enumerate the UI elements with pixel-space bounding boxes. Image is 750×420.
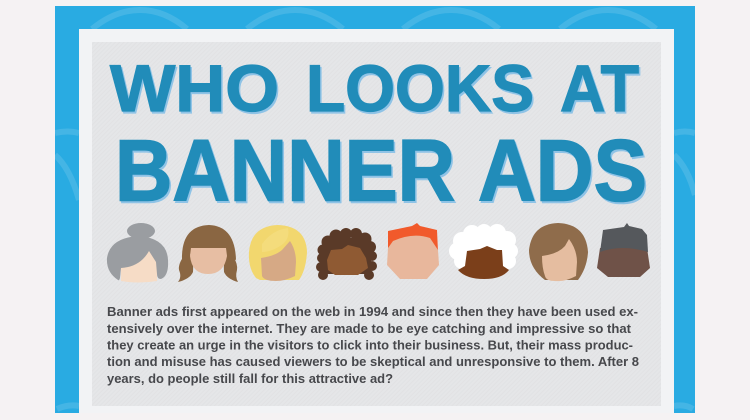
icon: red hair man <box>387 223 439 279</box>
panel: white inner card <box>79 29 674 413</box>
icon: dark curly hair woman <box>316 228 377 280</box>
intro paragraph: tensively over the internet. They are made to be eye catching and impressive so that <box>107 321 632 336</box>
icon: short brown hair woman <box>529 223 588 281</box>
title line: who looks at: WHO <box>112 53 280 127</box>
icon: white afro dark skin woman <box>449 224 518 279</box>
title line: banner ads: ADS <box>480 124 648 222</box>
title <box>110 51 648 222</box>
row of faces <box>107 223 650 282</box>
icon: brown hair pigtails woman <box>178 225 238 282</box>
title line: who looks at: LOOKS <box>308 53 536 127</box>
title line: who looks at <box>110 51 640 127</box>
title line: who looks at: AT <box>562 53 640 127</box>
title line: banner ads: BANNER <box>116 124 456 222</box>
intro paragraph: tion and misuse has caused viewers to be skeptical and unresponsive to them. After 8 <box>107 354 639 369</box>
intro paragraph: they create an urge in the visitors to click into their business. But, their mass produc- <box>107 338 633 352</box>
title line: who looks at: WHO <box>110 51 279 125</box>
title line: banner ads <box>115 122 648 222</box>
icon: grey hair bun woman <box>107 223 168 282</box>
title line: who looks at: AT <box>560 51 639 125</box>
title line: who looks at: LOOKS <box>306 51 534 125</box>
panel: grey textured background <box>92 42 661 406</box>
title line: banner ads: ADS <box>478 122 647 220</box>
icon: blond woman <box>249 225 307 281</box>
icon: dark skin man with grey hair <box>597 223 650 277</box>
intro paragraph <box>107 304 639 386</box>
intro paragraph: years, do people still fall for this attractive ad? <box>107 371 393 386</box>
intro paragraph: Banner ads first appeared on the web in 1994 and since then they have been used ex- <box>107 304 638 319</box>
title line: banner ads: BANNER <box>115 122 455 220</box>
